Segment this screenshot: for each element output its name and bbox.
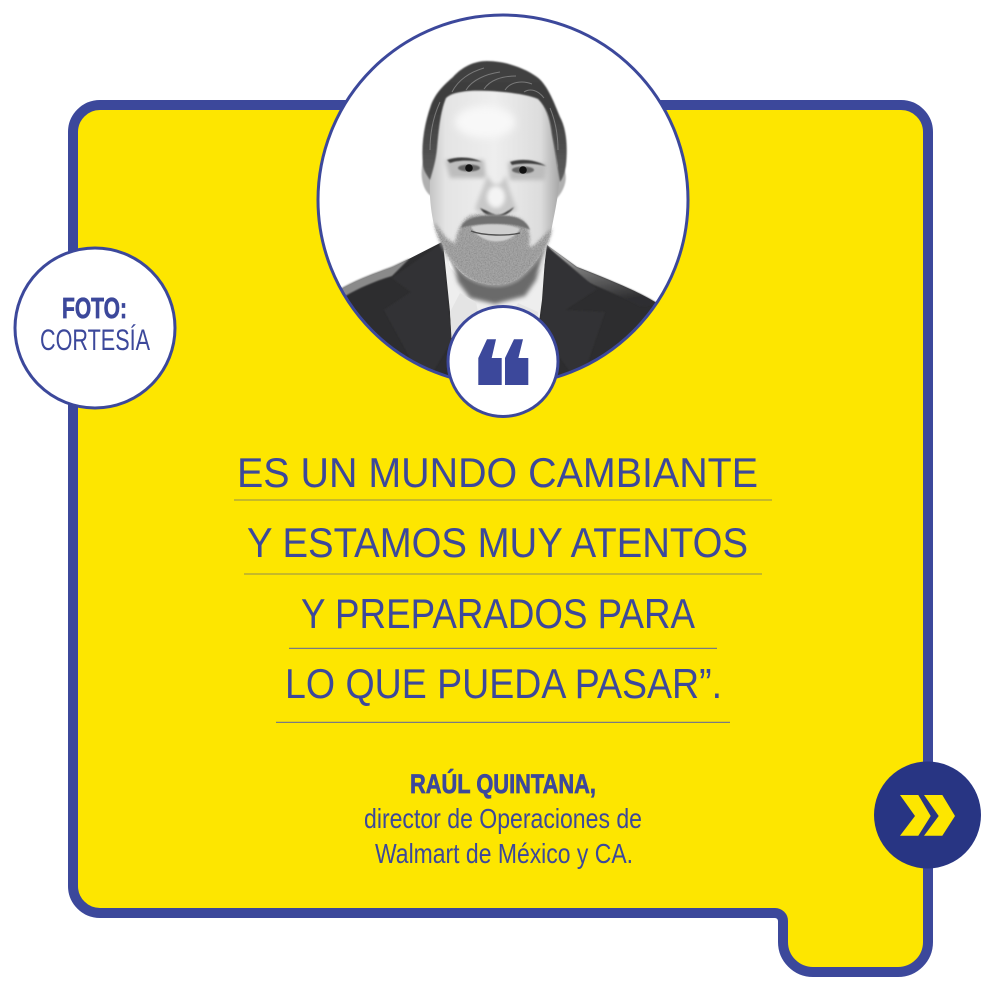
portrait shirt (443, 246, 545, 338)
portrait collar (450, 293, 538, 340)
badge: photo credit (15, 248, 175, 408)
portrait suit (342, 242, 656, 376)
quote text (234, 449, 772, 723)
portrait eyebrows (447, 158, 546, 166)
attribution (364, 768, 642, 869)
quote text: Y ESTAMOS MUY ATENTOS (247, 519, 748, 566)
icon: next arrow badge (874, 762, 981, 868)
portrait lapels (545, 246, 590, 284)
portrait nose shading (475, 175, 517, 214)
portrait hair streaks (430, 68, 558, 150)
portrait hair (422, 61, 567, 182)
portrait ears (422, 160, 566, 200)
portrait moustache (461, 216, 530, 230)
quote text: ES UN MUNDO CAMBIANTE (237, 449, 758, 496)
icon: opening quotation mark (478, 339, 528, 385)
portrait nose tip (487, 186, 505, 208)
attribution: Walmart de México y CA. (375, 838, 633, 869)
panel: yellow quote card with notched corner (73, 105, 928, 972)
quote text: LO QUE PUEDA PASAR”. (285, 660, 722, 707)
portrait nostrils (480, 207, 514, 218)
portrait left shoulder highlight (338, 258, 410, 298)
portrait brow shadow (445, 160, 547, 180)
portrait eyes (458, 164, 534, 174)
portrait mouth (471, 224, 520, 242)
credit label: FOTO: (62, 293, 127, 325)
attribution: RAÚL QUINTANA, (410, 768, 596, 799)
portrait ring (318, 15, 688, 385)
credit source: CORTESÍA (40, 324, 150, 357)
portrait lip line (471, 231, 520, 235)
portrait: circular photo of Raúl Quintana (318, 15, 688, 420)
quote text: Y PREPARADOS PARA (301, 590, 695, 637)
portrait beard (434, 214, 552, 287)
portrait forehead highlight (456, 108, 514, 136)
attribution: director de Operaciones de (364, 803, 642, 834)
portrait right shoulder highlight (547, 245, 660, 306)
portrait neck shadow (450, 240, 544, 304)
badge: quotation mark (448, 306, 558, 416)
portrait face (430, 90, 559, 285)
